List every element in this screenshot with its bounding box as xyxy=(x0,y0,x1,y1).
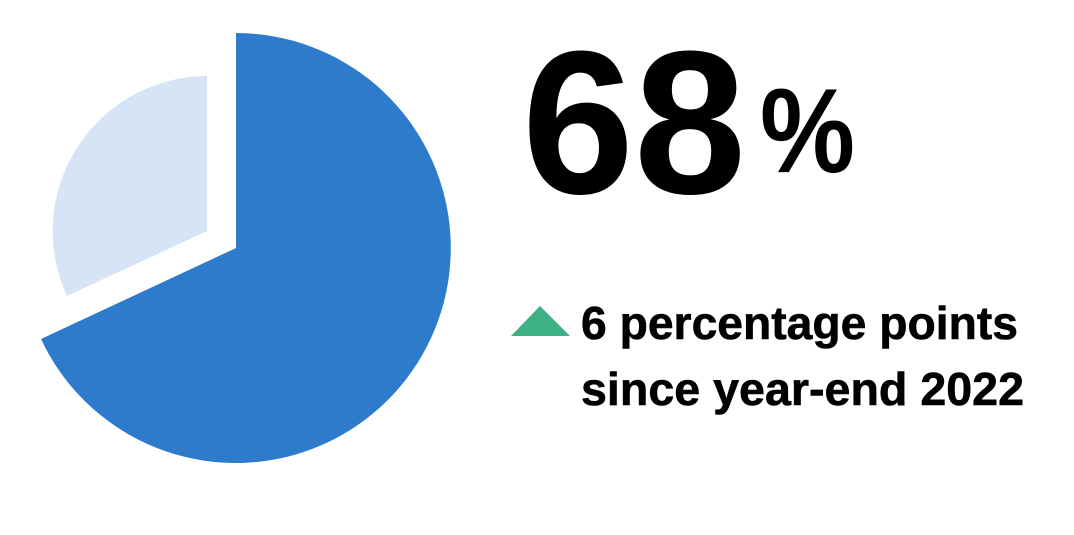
big number: 68%: 68 xyxy=(522,9,746,237)
pie slice: remaining 32 percent xyxy=(53,76,207,296)
pie chart xyxy=(41,33,451,463)
big number: 68% xyxy=(522,9,855,237)
change caption: since year-end 2022 xyxy=(581,363,1024,415)
pie slice: 68 percent xyxy=(41,33,451,463)
change caption xyxy=(581,297,1024,415)
icon: green up triangle xyxy=(511,306,570,336)
big number: 68%: % xyxy=(760,64,855,198)
change caption: 6 percentage points xyxy=(581,297,1018,349)
